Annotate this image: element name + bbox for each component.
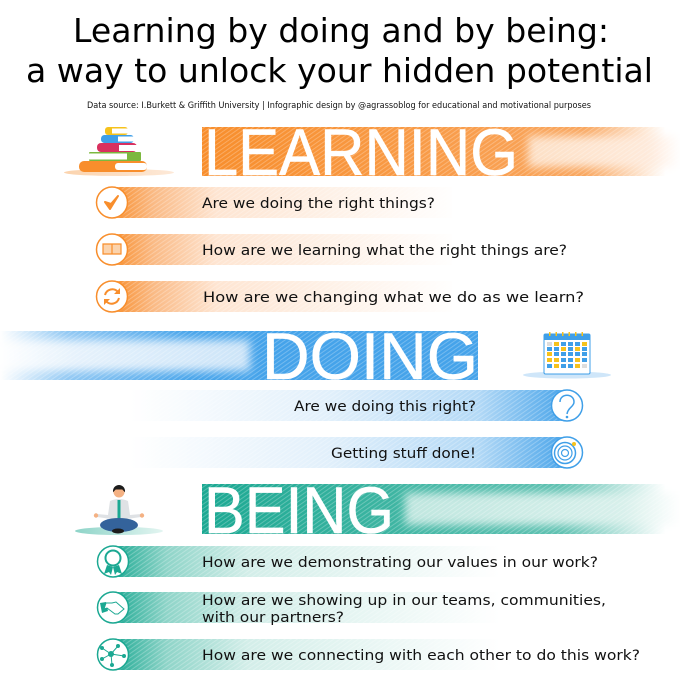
row: doing this right: Are we doing this right? [294, 399, 476, 415]
row: learning the right things: How are we learning what the right things are? [202, 243, 567, 259]
title: Learning by doing and by being: [73, 11, 609, 50]
title [26, 11, 653, 90]
panel: being [75, 473, 680, 670]
row: showing up [98, 592, 606, 626]
row: changing what we do [96, 281, 584, 312]
row: connecting [98, 639, 640, 670]
title: a way to unlock your hidden potential [26, 51, 653, 90]
banner: BEING: BEING [204, 473, 394, 547]
icon: stack of books [64, 127, 174, 176]
row: learning the right things [96, 234, 567, 265]
panel: doing [0, 319, 611, 468]
row: getting stuff done [130, 437, 582, 468]
row: connecting: How are we connecting with each other to do this work? [202, 648, 640, 664]
panel: learning [64, 115, 680, 312]
row: right things: Are we doing the right things? [202, 196, 435, 212]
row: right things [96, 187, 452, 218]
banner: LEARNING: LEARNING [204, 115, 518, 189]
row: demonstrating values [98, 546, 598, 577]
icon: meditating person [75, 486, 163, 535]
banner: BEING [202, 484, 668, 534]
row: getting stuff done: Getting stuff done! [331, 446, 476, 462]
banner: DOING [5, 331, 478, 380]
row: showing up: with our partners? [202, 610, 344, 626]
banner: DOING: DOING [262, 319, 478, 393]
banner: LEARNING [202, 127, 673, 176]
row: showing up: How are we showing up in our teams, communities, [202, 593, 606, 609]
row: changing what we do: How are we changing what we do as we learn? [203, 290, 584, 306]
row: demonstrating values: How are we demonstrating our values in our work? [202, 555, 598, 571]
row: doing this right [130, 390, 582, 421]
data source line: Data source: I.Burkett & Griffith University | Infographic design by @agrassoblog for educational and motivational purposes [87, 101, 592, 111]
icon: calendar [523, 332, 611, 378]
